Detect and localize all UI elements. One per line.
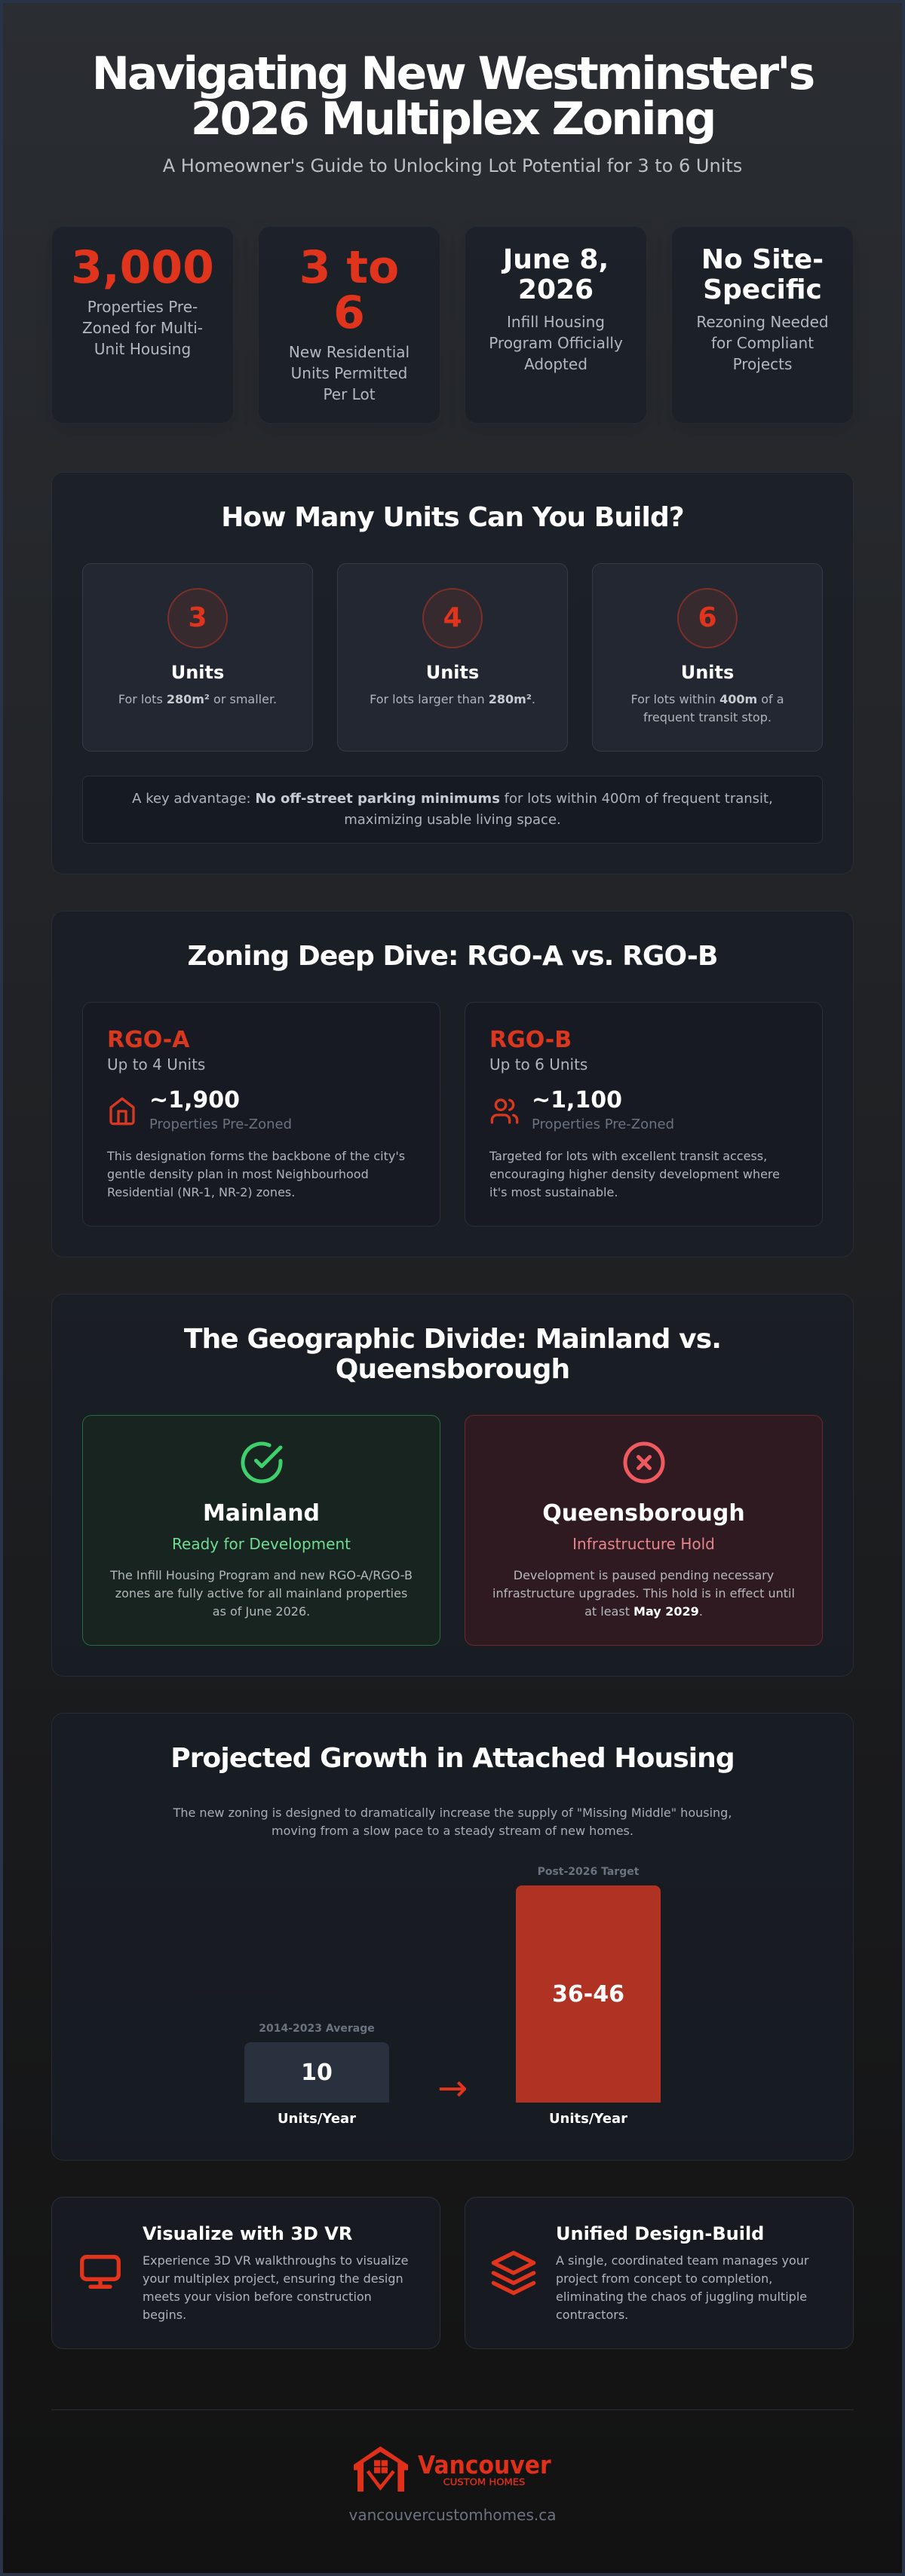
icon: check circle [241,1441,282,1484]
website url: vancouvercustomhomes.ca [348,2506,556,2524]
card: Mainland: Ready for Development [172,1535,351,1553]
card: Mainland: The Infill Housing Program and new RGO-A/RGO-B zones are fully active for all mainland properties as of June 2026. [110,1568,413,1619]
card: RGO-B: RGO-B [489,1027,572,1053]
footer divider [51,2409,854,2446]
title [92,47,813,145]
text: intro: The new zoning is designed to dramatically increase the supply of "Missing Middle" housing, [173,1806,732,1820]
stat: adoption date: June 8, 2026 [503,244,609,305]
card: design-build: A single, coordinated team manages your project from concept to completion, eliminating the chaos of juggling multiple contractors. [556,2253,808,2322]
card: RGO-A: This designation forms the backbone of the city's gentle density plan in most Neighbourhood Residential (NR-1, NR-2) zones. [107,1149,405,1199]
stat: adoption date: Infill Housing Program Officially Adopted [489,313,623,373]
card: Queensborough: Infrastructure Hold [572,1535,715,1553]
icon: layers [492,2251,535,2295]
bar: 2014-2023 average: 10 [301,2060,333,2085]
callout: parking advantage: A key advantage: No off-street parking minimums for lots within 400m of frequent transit, maximizing usable living space. [132,791,773,828]
card: Mainland [82,1415,440,1646]
card: RGO-B [465,1002,823,1227]
heading: Zoning Deep Dive: RGO-A vs. RGO-B [187,941,718,972]
card: 6 units: 6 [698,602,717,633]
panel: projected growth [51,1713,854,2161]
title: Navigating New Westminster's [92,47,813,100]
card: Mainland: Mainland [203,1500,320,1527]
card: Queensborough: Development is paused pending necessary infrastructure upgrades. This hold is in effect until at least May 2029. [492,1568,795,1619]
card: 3 units: For lots 280m² or smaller. [118,692,277,706]
card: design-build [465,2197,854,2349]
bar: 2014-2023 average: Units/Year [278,2111,356,2127]
header [92,47,813,176]
text: intro [173,1806,732,1838]
unit options [82,563,823,752]
stat: no rezoning: Rezoning Needed for Compliant Projects [696,313,829,373]
card: 4 units: For lots larger than 280m². [370,692,535,706]
card: RGO-B: ~1,100 [532,1087,622,1113]
area comparison [82,1415,823,1646]
bar: post-2026 target: Post-2026 Target [538,1866,639,1878]
card: RGO-A: Properties Pre-Zoned [149,1116,292,1132]
card: 6 units: For lots within 400m of a frequent transit stop. [630,692,784,724]
stat: 3,000 properties: Properties Pre-Zoned for Multi-Unit Housing [82,298,203,358]
card: 4 units: 4 [443,602,462,633]
heading: How Many Units Can You Build? [221,502,684,533]
icon: house [109,1098,135,1125]
stat: 3 to 6 units: 3 to 6 [299,241,399,339]
zone comparison [82,1002,823,1227]
panel: features [51,2197,854,2349]
title: 2026 Multiplex Zoning [191,93,714,145]
card: 6 units [592,563,823,752]
icon: monitor [80,2255,121,2289]
stat: no rezoning [671,226,854,424]
stat: 3 to 6 units: New Residential Units Permitted Per Lot [289,343,410,403]
bar chart [244,1866,661,2127]
card: design-build: Unified Design-Build [556,2223,764,2244]
subtitle: A Homeowner's Guide to Unlocking Lot Potential for 3 to 6 Units [163,155,742,176]
stat: 3,000 properties: 3,000 [71,241,214,294]
card: 3D VR: Experience 3D VR walkthroughs to visualize your multiplex project, ensuring the design meets your vision before construction begins. [143,2253,408,2322]
card: Queensborough [465,1415,823,1646]
panel: zoning deep dive [51,911,854,1257]
panel: how many units [51,472,854,874]
panel: geographic divide [51,1294,854,1677]
bar: post-2026 target: 36-46 [552,1981,624,2007]
logo: Vancouver [418,2450,551,2480]
bar: post-2026 target: Units/Year [549,2111,627,2127]
card: RGO-B: Up to 6 Units [489,1055,587,1074]
bar: post-2026 target [516,1866,661,2127]
logo: CUSTOM HOMES [443,2476,525,2488]
card: RGO-A: ~1,900 [149,1087,240,1113]
heading: The Geographic Divide: Mainland vs. Queensborough [184,1324,721,1385]
card: RGO-A [82,1002,440,1227]
logo [354,2446,551,2492]
callout: parking advantage [82,776,823,844]
card: Queensborough: Queensborough [542,1500,745,1527]
card: 3D VR: Visualize with 3D VR [143,2223,352,2244]
bar: 2014-2023 average: 2014-2023 Average [259,2023,375,2035]
stat: 3 to 6 units [258,226,440,424]
panel: key stats [52,227,853,423]
card: RGO-B: Properties Pre-Zoned [532,1116,674,1132]
heading: Projected Growth in Attached Housing [170,1743,735,1774]
card: 3 units [82,563,313,752]
card: 3 units: Units [171,662,224,683]
card: RGO-B: Targeted for lots with excellent transit access, encouraging higher density development where it's most sustainable. [489,1149,780,1199]
card: 3D VR [51,2197,440,2349]
card: 6 units: Units [681,662,734,683]
stat: adoption date [465,226,647,424]
card: RGO-A: RGO-A [107,1027,189,1053]
icon: x circle [623,1441,665,1484]
card: 4 units: Units [426,662,479,683]
arrow: → [437,2067,468,2109]
card: 3 units: 3 [188,602,207,633]
stat: 3,000 properties [51,226,234,424]
bar: 2014-2023 average [244,2023,389,2127]
text: intro: moving from a slow pace to a steady stream of new homes. [272,1824,634,1838]
stat: no rezoning: No Site-Specific [701,244,824,305]
card: 4 units [337,563,568,752]
icon: users [490,1098,519,1124]
card: RGO-A: Up to 4 Units [107,1055,205,1074]
